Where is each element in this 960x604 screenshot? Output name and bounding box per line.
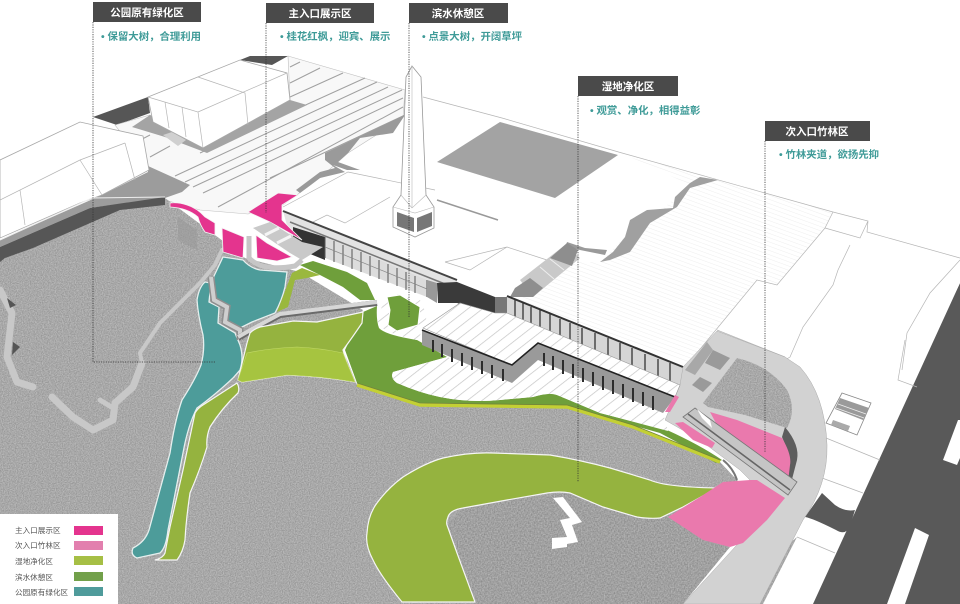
roof vent building	[826, 393, 871, 435]
light green wetland zones	[155, 312, 717, 602]
winding footpath	[0, 250, 222, 430]
legend: 公园原有绿化区: 公园原有绿化区	[15, 587, 69, 597]
dark curb	[723, 460, 737, 480]
dark wall left	[293, 227, 325, 260]
plaza	[115, 56, 405, 214]
park ground	[0, 197, 760, 604]
lower wedge tone	[238, 347, 355, 382]
diagonal bridge	[683, 408, 797, 495]
shaded wall	[782, 427, 798, 487]
callout: 次入口竹林区: 次入口竹林区	[786, 125, 849, 138]
footbridges	[211, 277, 377, 340]
strip along stream	[155, 383, 239, 560]
paved squares	[705, 350, 730, 370]
pale lawn edge	[0, 197, 165, 240]
dark retaining wall	[0, 197, 165, 262]
roof terrace	[423, 303, 680, 397]
lower right slope	[447, 493, 730, 604]
entrance steps	[249, 222, 323, 268]
callout: 滨水休憩区: • 点景大树，开阔草坪	[422, 30, 523, 43]
terrace with lower building	[345, 294, 722, 463]
legend: 湿地净化区: 湿地净化区	[15, 556, 53, 566]
teal water zone	[132, 257, 287, 558]
callout: 滨水休憩区: 滨水休憩区	[432, 7, 485, 20]
shadow band	[600, 177, 718, 262]
white walk around plot	[378, 294, 427, 340]
pink bamboo zones	[668, 412, 790, 547]
surrounding buildings and plaza	[0, 56, 405, 247]
callout: 公园原有绿化区: 公园原有绿化区	[110, 6, 184, 19]
callout: 公园原有绿化区	[93, 2, 201, 43]
legend: 滨水休憩区: 滨水休憩区	[15, 572, 53, 582]
legend: 主入口展示区: 主入口展示区	[15, 525, 61, 535]
light green arch edge	[277, 268, 320, 312]
white rock cut	[552, 497, 582, 549]
east pavement and forest area	[665, 331, 827, 604]
pink main entrance zone	[170, 193, 302, 261]
callout: 湿地净化区	[578, 76, 701, 117]
leader line: 次入口竹林区	[764, 141, 766, 452]
callout: 次入口竹林区	[765, 121, 879, 161]
planter wedge	[178, 217, 197, 250]
terrace paving	[392, 357, 668, 431]
outer gray strip	[720, 537, 797, 604]
textured planting mound	[703, 358, 792, 428]
stair block	[520, 245, 580, 297]
callout: 主入口展示区: • 桂花红枫，迎宾、展示	[280, 30, 390, 43]
dark green arch	[300, 261, 375, 300]
pavement ribbon	[665, 331, 827, 604]
callout: 公园原有绿化区: • 保留大树，合理利用	[101, 30, 201, 43]
roof outline	[283, 97, 960, 370]
upper lake	[214, 257, 287, 328]
callout: 湿地净化区: 湿地净化区	[602, 80, 655, 93]
yellow wall strip	[357, 383, 720, 462]
callout: 主入口展示区: 主入口展示区	[288, 7, 352, 20]
facade of main building	[283, 211, 683, 385]
roof linework	[283, 97, 960, 553]
callout: 湿地净化区: • 观赏、净化，相得益彰	[590, 104, 701, 117]
dark green plot	[387, 295, 420, 331]
callout: 次入口竹林区: • 竹林夹道，欲扬先抑	[779, 148, 879, 161]
leader line: 公园原有绿化区	[93, 22, 215, 362]
legend: 次入口竹林区: 次入口竹林区	[15, 540, 61, 550]
upper arcade	[507, 296, 683, 385]
block building A	[148, 60, 290, 148]
main roof and buildings	[283, 97, 960, 553]
block building B	[0, 122, 149, 238]
wedge	[238, 312, 363, 382]
gray pad	[163, 132, 186, 146]
large swoosh	[367, 453, 717, 602]
dark green band	[345, 306, 722, 463]
leader line: 主入口展示区	[265, 23, 267, 213]
plaza stripes	[125, 62, 405, 207]
lower facade	[422, 330, 675, 413]
legend	[0, 514, 118, 604]
leader line: 滨水休憩区	[408, 23, 410, 318]
glass bay	[325, 237, 427, 297]
stream	[132, 282, 242, 558]
gray bank	[0, 166, 190, 247]
callout: 滨水休憩区	[409, 3, 523, 43]
leader line: 湿地净化区	[577, 96, 579, 482]
obelisk monument	[393, 66, 434, 237]
gray strip beneath block	[132, 100, 307, 153]
callout: 主入口展示区	[266, 3, 390, 43]
obelisk side shadow	[296, 115, 405, 193]
dark wall center	[437, 282, 495, 313]
roof court	[437, 122, 618, 198]
